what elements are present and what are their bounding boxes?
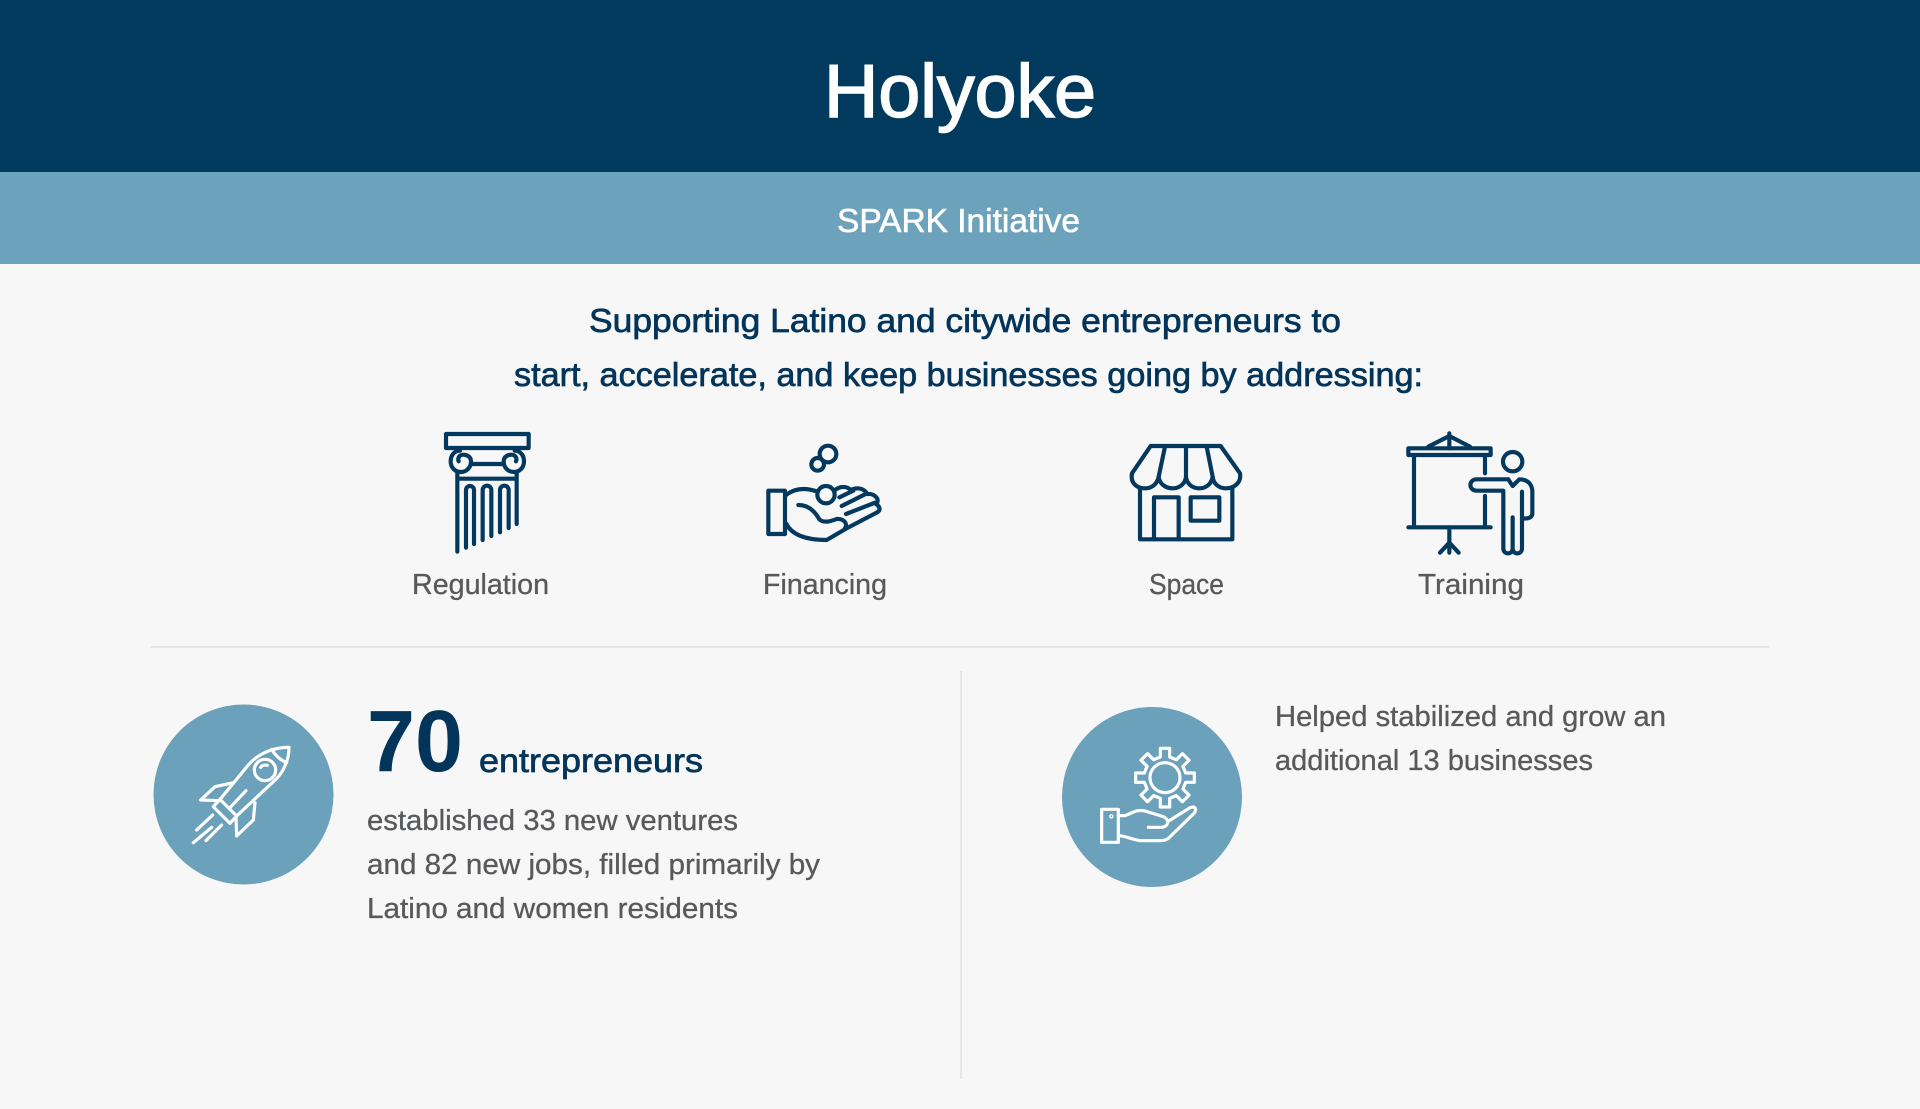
icon: column	[446, 434, 529, 552]
description: additional 13 businesses	[1275, 745, 1593, 777]
description: established 33 new ventures	[367, 805, 738, 837]
icon: hand with gear badge	[1062, 707, 1242, 887]
title: Holyoke	[824, 49, 1096, 133]
intro text	[514, 302, 1423, 393]
intro text: start, accelerate, and keep businesses going by addressing:	[514, 356, 1423, 393]
label: Regulation	[412, 569, 549, 601]
description	[1275, 701, 1666, 777]
intro text: Supporting Latino and citywide entrepreneurs to	[589, 302, 1341, 339]
subtitle: SPARK Initiative	[837, 202, 1080, 239]
item: regulation	[412, 434, 549, 601]
icon: storefront	[1132, 446, 1240, 539]
item: training	[1408, 433, 1532, 601]
big number: 70	[367, 693, 463, 790]
label: Space	[1149, 569, 1224, 601]
item: financing	[763, 446, 887, 601]
icon: rocket badge	[154, 704, 334, 884]
item: space	[1132, 446, 1240, 601]
header banner	[0, 0, 1920, 172]
description: Latino and women residents	[367, 893, 738, 925]
description: Helped stabilized and grow an	[1275, 701, 1666, 733]
number caption: entrepreneurs	[479, 742, 703, 779]
panel: businesses	[1062, 701, 1666, 887]
description: and 82 new jobs, filled primarily by	[367, 849, 820, 881]
panel: entrepreneurs	[154, 693, 820, 925]
subtitle band	[0, 172, 1920, 264]
description	[367, 805, 820, 925]
label: Financing	[763, 569, 887, 601]
icon: presenter and board	[1408, 433, 1532, 553]
icon: hand with coins	[768, 446, 880, 540]
label: Training	[1418, 569, 1524, 601]
